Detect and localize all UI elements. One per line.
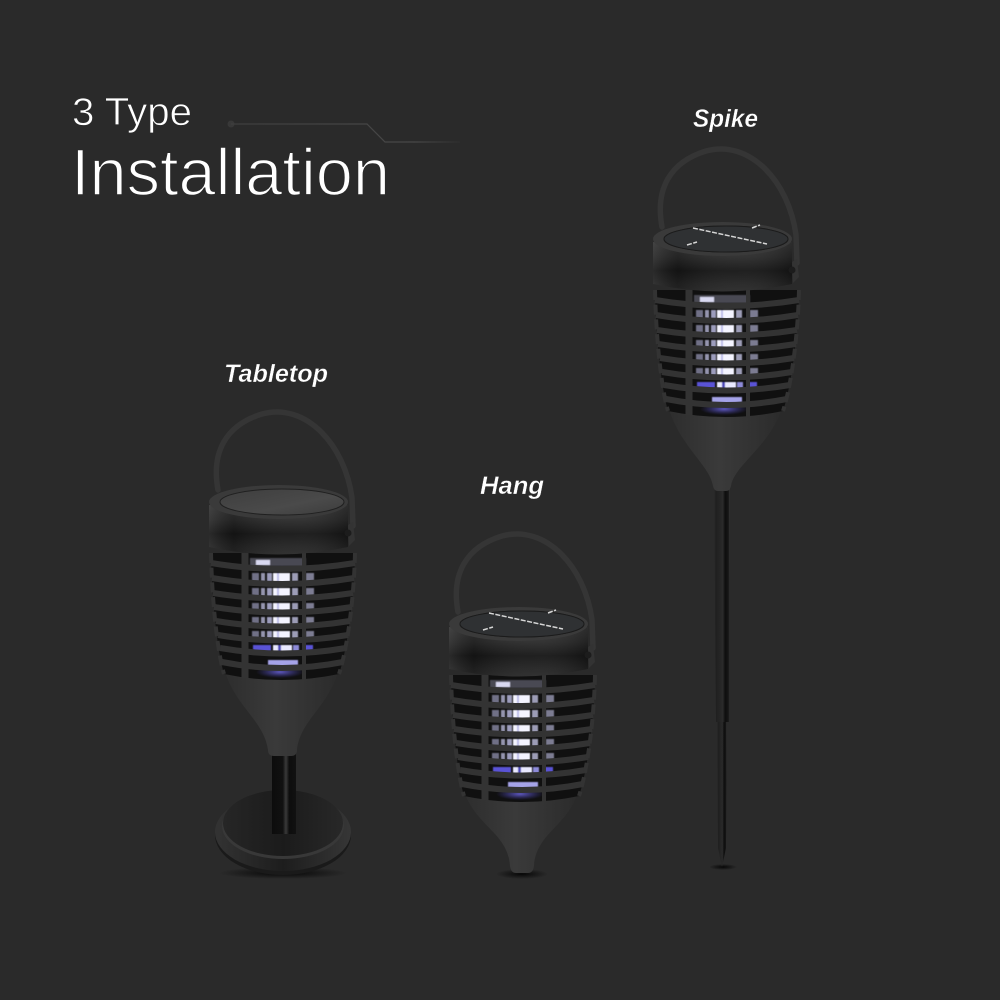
label: Spike: Spike <box>693 105 758 133</box>
lower spike rod <box>717 722 727 867</box>
solar panel marks <box>460 610 584 637</box>
heading: 3 Type: 3 Type <box>72 91 192 134</box>
product: spike lantern <box>653 149 799 870</box>
table base <box>215 790 351 875</box>
upper spike rod <box>714 486 730 722</box>
table stem <box>272 750 296 834</box>
spike lantern head <box>653 149 799 417</box>
label: Tabletop: Tabletop <box>224 360 328 388</box>
product: tabletop lantern <box>209 412 355 879</box>
label: Hang: Hang <box>480 472 544 500</box>
lantern head <box>209 412 355 680</box>
lantern body taper <box>224 668 339 756</box>
decorative connector line <box>228 120 460 142</box>
hanging body taper <box>463 788 579 873</box>
solar panel marks <box>664 225 788 252</box>
product: hanging lantern <box>449 534 595 879</box>
spike body taper <box>668 405 783 491</box>
hanging lantern head <box>449 534 595 802</box>
heading: Installation: Installation <box>71 135 390 209</box>
